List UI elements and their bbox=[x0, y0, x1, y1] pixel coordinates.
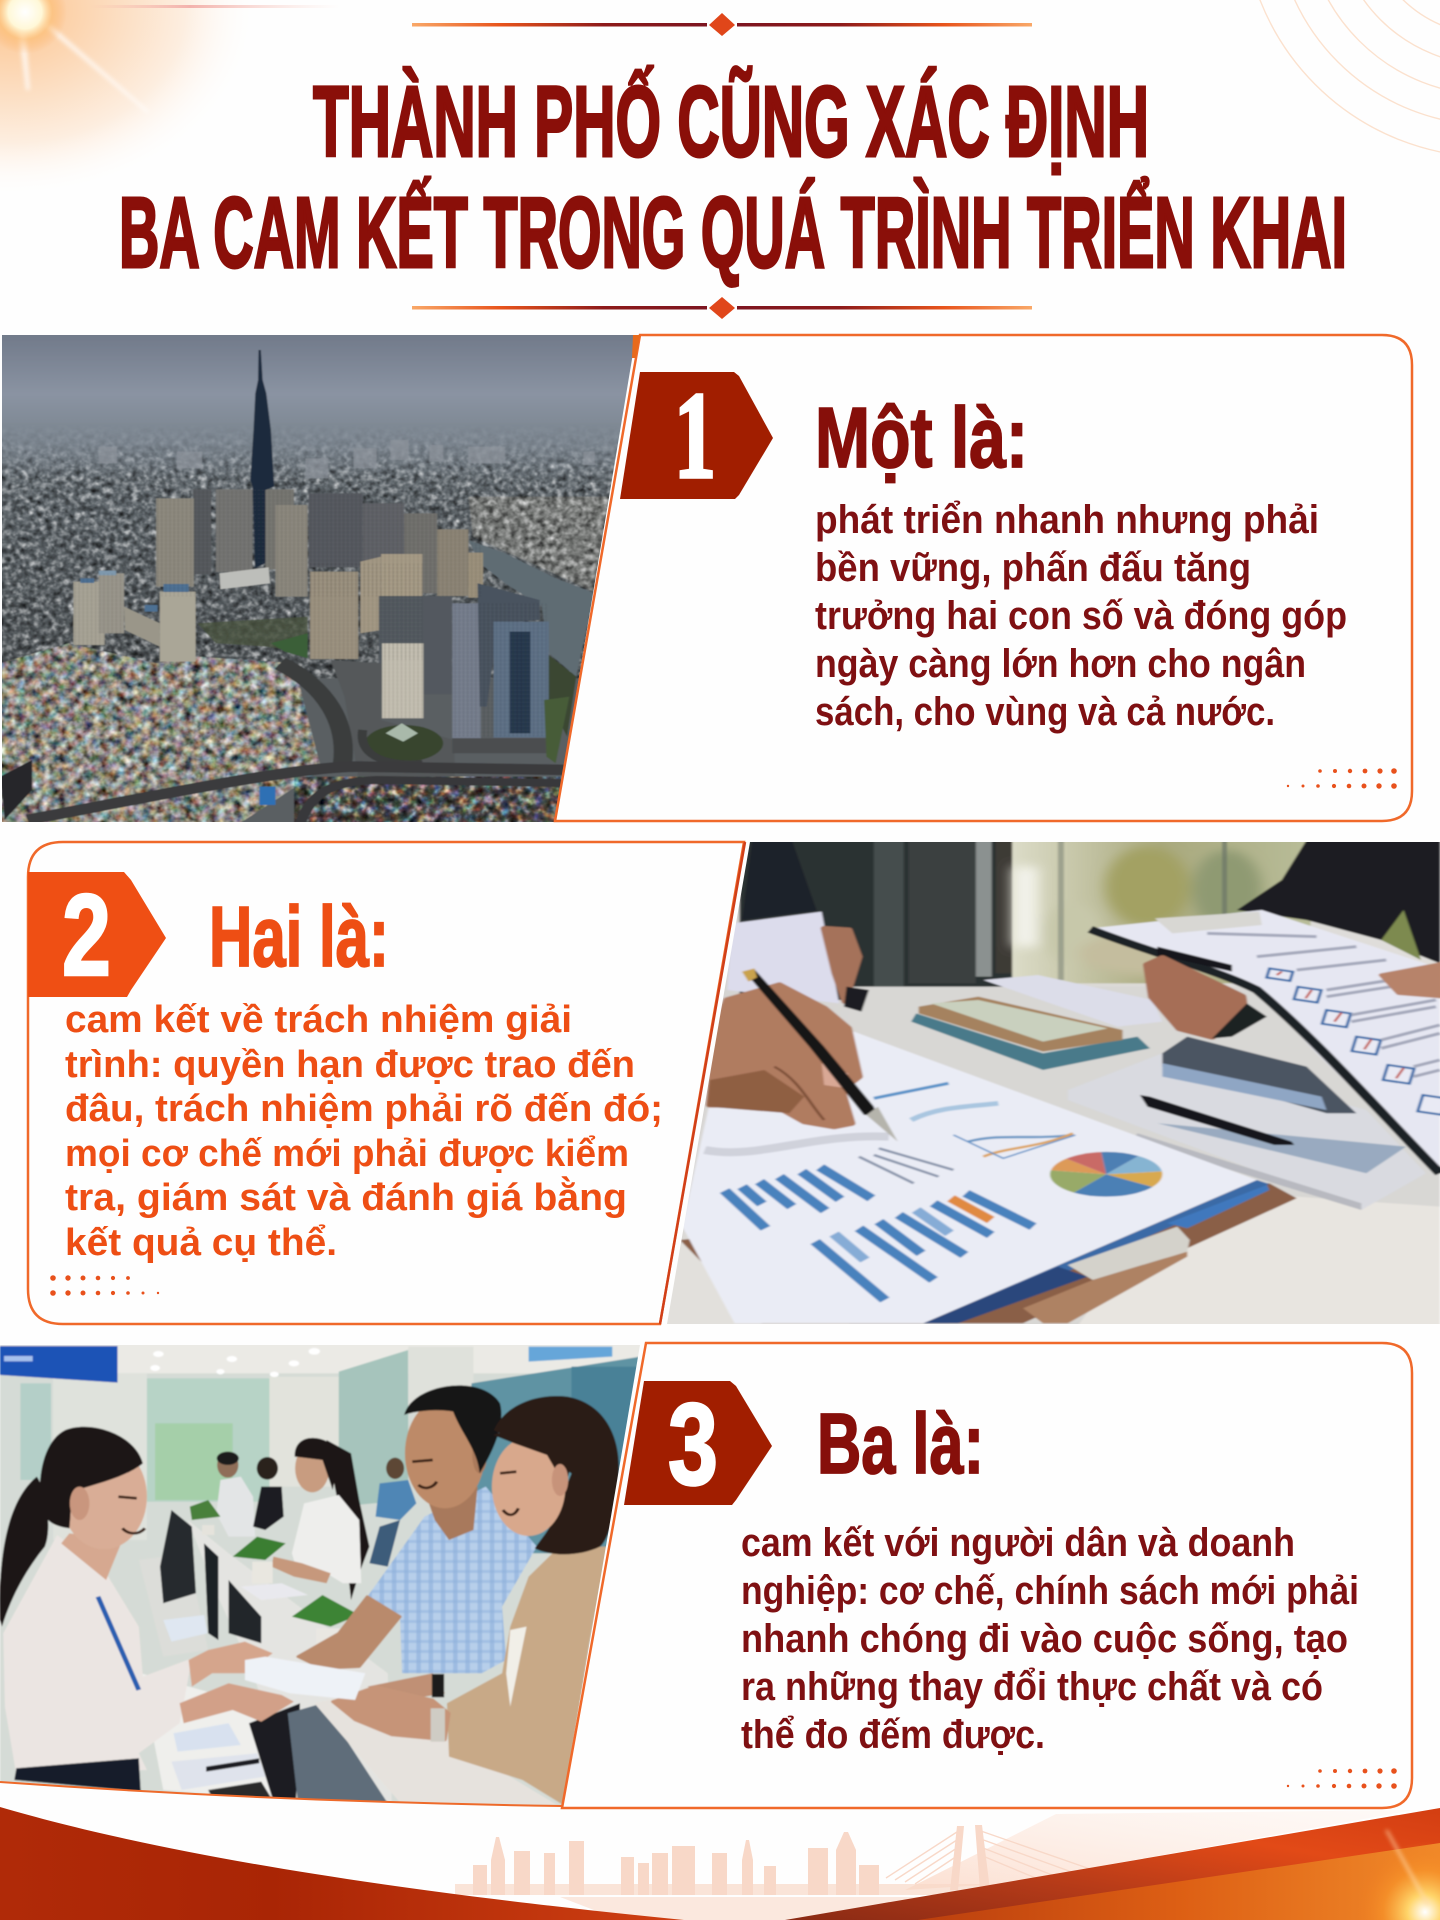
clipboard with checklist bbox=[1090, 910, 1440, 1173]
body text 1: trưởng hai con số và đóng góp bbox=[815, 594, 1347, 638]
desk plants bbox=[190, 1500, 359, 1645]
body text 3 bbox=[741, 1521, 1359, 1757]
number badge 2: 2 bbox=[62, 870, 111, 1000]
body text 1: sách, cho vùng và cả nước. bbox=[815, 690, 1275, 734]
mini line charts bbox=[705, 1083, 1075, 1183]
glass towers front bbox=[379, 583, 549, 738]
body text 3: cam kết với người dân và doanh bbox=[741, 1521, 1295, 1565]
lower counter and papers bbox=[141, 1673, 278, 1800]
bar charts bbox=[725, 1167, 1033, 1300]
photo: city skyline with Landmark 81 tower bbox=[0, 330, 652, 830]
windows bbox=[147, 1378, 269, 1502]
paper stack left bbox=[727, 912, 839, 1003]
dot pattern 1 bbox=[1287, 768, 1397, 789]
number badge 3 bbox=[624, 1379, 772, 1509]
middle staff woman bbox=[327, 1440, 369, 1600]
footer: orange lower wedge bbox=[918, 1843, 1440, 1920]
footer: skyline and bridge watermark bbox=[455, 1810, 1414, 1920]
footer: red left wedge bbox=[0, 1807, 684, 1920]
clerk woman bbox=[0, 1427, 294, 1792]
table light bbox=[849, 987, 1440, 1340]
photo 3 bottom curve line bbox=[0, 1782, 562, 1806]
decorative arcs, top right bbox=[1243, 0, 1440, 157]
body text 3: thể đo đếm được. bbox=[741, 1713, 1045, 1757]
dot pattern 3 bbox=[1287, 1768, 1397, 1789]
books bbox=[983, 975, 1162, 1027]
paper being exchanged bbox=[245, 1657, 365, 1700]
blue roof accents bbox=[80, 571, 189, 612]
number badge 2 bbox=[28, 870, 166, 1000]
counter with monitors bbox=[188, 1520, 392, 1803]
body text 1: phát triển nhanh nhưng phải bbox=[815, 498, 1319, 542]
ceiling lights bbox=[150, 1348, 320, 1377]
body text 2: tra, giám sát và đánh giá bằng bbox=[65, 1175, 627, 1219]
river bbox=[468, 540, 595, 677]
number badge 3: 3 bbox=[668, 1379, 718, 1509]
dot pattern 2 bbox=[50, 1275, 159, 1296]
photo: staff handing a paper to citizens at service counter bbox=[0, 1340, 653, 1813]
body text 1 bbox=[815, 498, 1347, 734]
heading: Một là: Một là: bbox=[815, 391, 1028, 486]
heading: Ba là: Ba là: bbox=[817, 1397, 984, 1492]
body text 3: nghiệp: cơ chế, chính sách mới phải bbox=[741, 1569, 1359, 1613]
panel 1 card bbox=[555, 335, 1412, 821]
body text 1: ngày càng lớn hơn cho ngân bbox=[815, 642, 1306, 686]
body text 2 bbox=[65, 999, 663, 1264]
body text 2: đâu, trách nhiệm phải rõ đến đó; bbox=[65, 1088, 663, 1130]
mid towers bbox=[73, 554, 422, 662]
top ornament divider bbox=[412, 13, 1032, 36]
heading: Hai là: Hai là: bbox=[209, 890, 389, 985]
body text 2: kết quả cụ thể. bbox=[65, 1222, 337, 1264]
body text 3: nhanh chóng đi vào cuộc sống, tạo bbox=[741, 1617, 1348, 1661]
citizen woman bbox=[333, 1396, 619, 1805]
background people bbox=[216, 1477, 255, 1537]
bottom ornament divider bbox=[412, 297, 1032, 319]
podium and green bbox=[219, 567, 270, 589]
body text 2: trình: quyền hạn được trao đến bbox=[65, 1044, 635, 1086]
main document bbox=[682, 1032, 1257, 1323]
landmark tower bbox=[250, 350, 274, 568]
photo: hands reviewing reports and charts bbox=[660, 840, 1440, 1340]
clipboard under document bbox=[680, 1183, 1297, 1323]
number badge 1: 1 bbox=[674, 367, 716, 504]
citizen man bbox=[298, 1385, 537, 1700]
panel 2 card bbox=[28, 842, 745, 1324]
panel 3 card bbox=[562, 1343, 1412, 1808]
towers back row bbox=[156, 489, 483, 598]
footer: right band bbox=[785, 1808, 1440, 1920]
curved road and highway bbox=[280, 663, 343, 767]
room background bbox=[740, 840, 1013, 1000]
decorative sun glow, top left bbox=[0, 0, 340, 200]
right paper stacks bbox=[1068, 1053, 1426, 1210]
title bbox=[119, 66, 1347, 289]
writing hand with pen bbox=[710, 985, 859, 1127]
body text 2: mọi cơ chế mới phải được kiểm bbox=[65, 1133, 629, 1175]
number badge 1 bbox=[620, 367, 773, 504]
pie chart bbox=[1050, 1152, 1162, 1197]
body text 1: bền vững, phấn đấu tăng bbox=[815, 546, 1251, 590]
right hand bbox=[1147, 958, 1244, 1037]
pen on stack bbox=[1140, 1095, 1294, 1145]
body text 2: cam kết về trách nhiệm giải bbox=[65, 999, 572, 1041]
distant towers bbox=[99, 440, 595, 478]
body text 3: ra những thay đổi thực chất và có bbox=[741, 1665, 1323, 1709]
